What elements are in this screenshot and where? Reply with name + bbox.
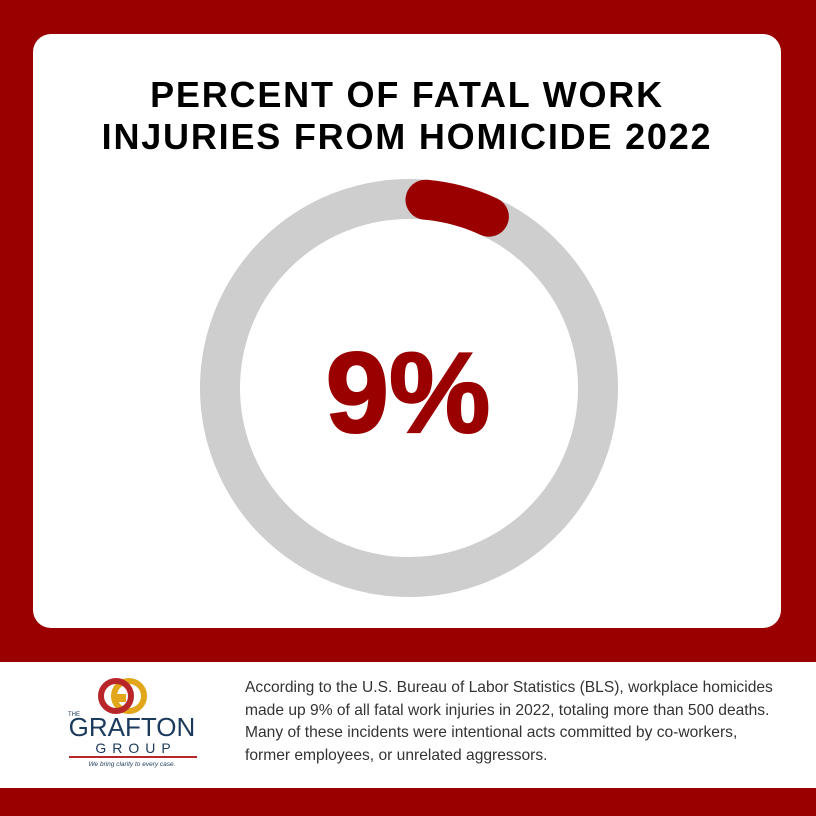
logo [68,678,197,768]
description text: made up 9% of all fatal work injuries in 2022, totaling more than 500 deaths. [245,702,769,718]
logo: We bring clarity to every case. [89,761,176,768]
logo: GRAFTON [69,712,195,742]
title: PERCENT OF FATAL WORK [150,74,664,115]
logo: GROUP [95,740,177,756]
title [102,74,712,157]
description text [245,679,773,764]
description text: According to the U.S. Bureau of Labor Statistics (BLS), workplace homicides [245,679,773,696]
panel: main card [33,34,781,628]
donut chart: 9% [326,330,490,457]
title: INJURIES FROM HOMICIDE 2022 [102,116,712,157]
description text: former employees, or unrelated aggressors. [245,746,548,764]
description text: Many of these incidents were intentional acts committed by co-workers, [245,724,737,741]
logo: THE [68,712,80,718]
footer band [0,662,816,788]
